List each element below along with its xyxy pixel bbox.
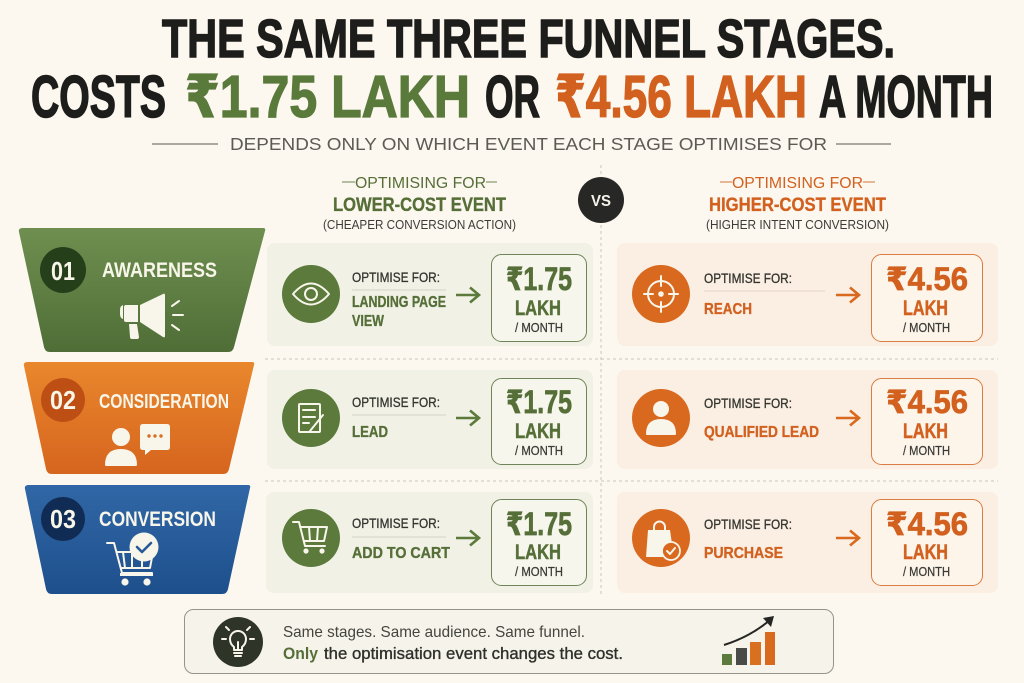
icon: person with speech bubble (105, 424, 170, 466)
panel: higher-cost row 3: ₹4.56 (886, 506, 968, 542)
icon: shopping cart (282, 509, 340, 567)
panel: higher-cost row 3: PURCHASE (704, 545, 783, 562)
panel: lower-cost row 3: OPTIMISE FOR: (352, 516, 440, 531)
panel: lower-cost row 2 (267, 370, 593, 469)
icon: person (632, 389, 690, 447)
funnel stage 01: awareness (19, 228, 265, 352)
funnel stage 02: consideration: 02 (50, 385, 76, 415)
funnel stage 03: conversion: CONVERSION (99, 508, 216, 531)
funnel stage 01: awareness: AWARENESS (102, 259, 217, 282)
subtitle: DEPENDS ONLY ON WHICH EVENT EACH STAGE OPTIMISES FOR (230, 134, 827, 154)
panel: lower-cost row 2: ₹1.75 (506, 384, 572, 420)
funnel stage 02: consideration (24, 362, 254, 474)
icon: eye (282, 265, 340, 323)
panel: lower-cost row 1: LAKH (515, 297, 561, 320)
panel: higher-cost row 3: OPTIMISE FOR: (704, 517, 792, 532)
panel: higher-cost row 1: ₹4.56 (886, 261, 968, 297)
panel: lower-cost row 1: / MONTH (515, 321, 563, 335)
panel: lower-cost row 1: ₹1.75 (506, 261, 572, 297)
column header: lower-cost event: (CHEAPER CONVERSION ACTION) (323, 217, 516, 232)
funnel stage 02: consideration: CONSIDERATION (99, 391, 229, 413)
title: ₹4.56 LAKH (555, 64, 807, 130)
callout: takeaway: Same stages. Same audience. Same funnel. (283, 624, 585, 641)
panel: lower-cost row 2: / MONTH (515, 444, 563, 458)
panel: lower-cost row 3: ₹1.75 (506, 506, 572, 542)
funnel stage 01: awareness: 01 (51, 256, 75, 286)
panel: lower-cost row 3: / MONTH (515, 565, 563, 579)
callout: takeaway: Only (283, 645, 319, 663)
icon: lightbulb (213, 617, 263, 667)
panel: higher-cost row 2: LAKH (903, 420, 948, 443)
panel: higher-cost row 2: OPTIMISE FOR: (704, 396, 792, 411)
panel: higher-cost row 2: QUALIFIED LEAD (704, 424, 819, 441)
panel: higher-cost row 1 (617, 243, 998, 346)
panel: lower-cost row 1: VIEW (352, 313, 385, 330)
panel: lower-cost row 2: LAKH (515, 420, 561, 443)
panel: lower-cost row 2: OPTIMISE FOR: (352, 395, 440, 410)
icon: cart with check (107, 532, 158, 586)
panel: lower-cost row 1 (267, 243, 593, 346)
title: COSTS (31, 64, 166, 130)
panel: higher-cost row 1: OPTIMISE FOR: (704, 271, 792, 286)
column header: higher-cost event: (HIGHER INTENT CONVERSION) (706, 217, 889, 232)
title: OR (485, 64, 540, 130)
callout: takeaway (184, 610, 834, 674)
funnel stage 03: conversion (25, 485, 250, 594)
callout: takeaway: the optimisation event changes the cost. (324, 645, 623, 663)
panel: higher-cost row 3 (617, 492, 998, 593)
panel: lower-cost row 2: LEAD (352, 424, 388, 441)
panel: higher-cost row 3: / MONTH (903, 565, 950, 579)
title (31, 9, 993, 130)
icon: shopping bag with check (632, 509, 690, 567)
vs badge: VS (591, 193, 611, 210)
panel: higher-cost row 2: ₹4.56 (886, 384, 968, 420)
column header: higher-cost event: OPTIMISING FOR (732, 175, 863, 192)
panel: higher-cost row 2: / MONTH (903, 444, 950, 458)
panel: lower-cost row 3: ADD TO CART (352, 545, 450, 562)
icon: rising bar chart (722, 616, 775, 665)
icon: form and pen (282, 389, 340, 447)
panel: lower-cost row 3: LAKH (515, 541, 561, 564)
panel: lower-cost row 1: LANDING PAGE (352, 294, 446, 311)
vs badge (578, 177, 624, 223)
icon: target (632, 265, 690, 323)
panel: higher-cost row 1: / MONTH (903, 321, 950, 335)
funnel stage 03: conversion: 03 (50, 504, 76, 534)
column header: lower-cost event (323, 175, 516, 232)
column header: higher-cost event: HIGHER-COST EVENT (709, 194, 886, 216)
title: ₹1.75 LAKH (185, 64, 470, 130)
panel: lower-cost row 1: OPTIMISE FOR: (352, 270, 440, 285)
panel: lower-cost row 3 (266, 492, 593, 593)
panel: higher-cost row 2 (617, 370, 998, 469)
column header: lower-cost event: OPTIMISING FOR (355, 175, 486, 192)
panel: higher-cost row 1: REACH (704, 301, 752, 318)
column header: higher-cost event (706, 175, 889, 232)
panel: higher-cost row 3: LAKH (903, 541, 948, 564)
column header: lower-cost event: LOWER-COST EVENT (333, 194, 506, 216)
icon: megaphone (120, 294, 183, 339)
panel: higher-cost row 1: LAKH (903, 297, 948, 320)
